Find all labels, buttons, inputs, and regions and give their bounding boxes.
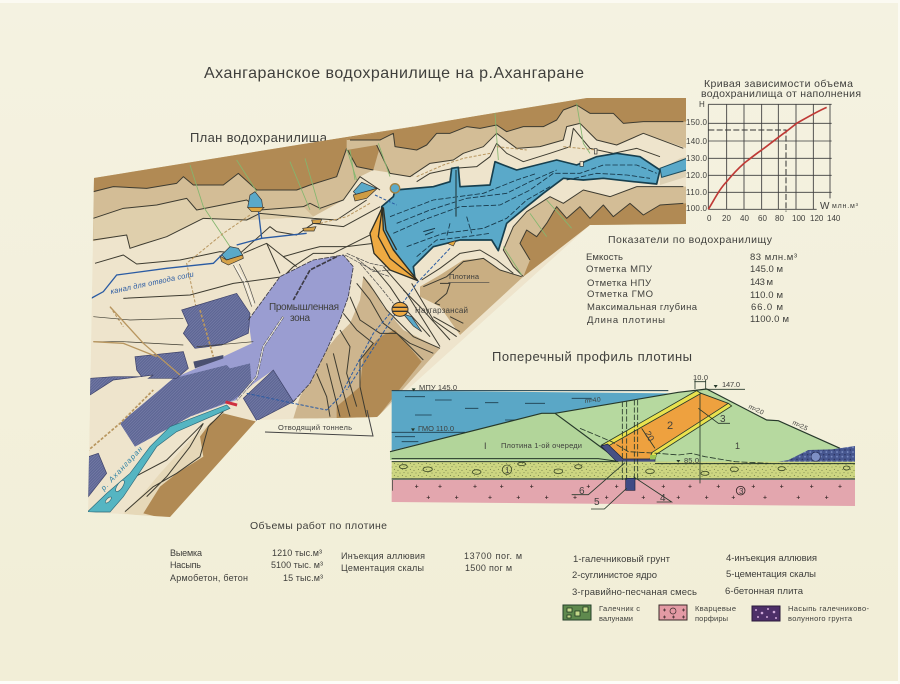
chart axis labels: 140 [827,214,841,223]
gravel toe [768,446,855,464]
chart axis labels: 60 [758,214,767,223]
map label: Naugarysay: Наугарзансай [415,306,468,315]
section labels: 20 [643,429,656,443]
chart axis labels: млн.м³ [832,203,859,210]
section labels: 10.0 [693,373,708,382]
chart axis labels: 80 [775,214,784,223]
rock layer [392,480,855,506]
legend: pebbles swatch [563,604,640,623]
dam [370,207,418,281]
table: dam works: 1500 пог м [465,563,512,573]
panel: reservoir indicators: Отметка НПУ [587,278,652,289]
leader lines [572,380,745,509]
map label: canal: канал для отвода соли [110,269,195,296]
table: dam works: Армобетон, бетон [170,573,248,583]
terrain west [90,127,413,327]
section labels: 5 [594,497,600,508]
tunnel label [265,410,373,436]
panel: reservoir indicators: Емкость [586,252,623,263]
section labels: m=2.0 [747,403,765,417]
seepage line [580,428,768,463]
section labels: МПУ 145.0 [419,383,457,392]
legend: materials list: 1-галечниковый грунт [573,554,671,565]
ponds and canal [85,182,400,307]
legend: porphyry swatch: Кварцевые [695,604,736,613]
chart axis labels: 120 [810,214,824,223]
section labels: 147.0 [722,380,740,389]
chart axis labels: W [820,201,830,212]
chart axis labels: 0 [707,214,712,223]
terrain east [347,97,687,277]
chart axis labels [686,100,859,223]
table: dam works [170,548,522,583]
table: dam works: 15 тыс.м³ [283,573,323,583]
section labels: 3 [720,414,726,425]
legend: porphyry swatch: порфиры [695,614,728,623]
chart axis labels: 150.0 [686,118,708,127]
core [607,392,728,459]
section labels: Плотина 1-ой очереди [501,441,582,450]
legend: materials list: 5-цементация скалы [726,569,816,580]
map label: river: р. Ахангаран [98,445,144,493]
first stage dam [390,413,622,462]
reservoir [347,149,687,390]
legend: materials list: 6-бетонная плита [725,586,804,597]
section labels: m=4.0 [584,396,601,405]
panel: reservoir plan map [85,97,687,520]
map heading: План водохранилища [190,130,328,145]
alluvium layer [392,462,855,478]
table: dam works: 1210 тыс.м³ [272,548,322,558]
chart axis labels: 120.0 [686,171,708,180]
river [87,405,230,512]
grout curtain [626,478,635,490]
chart axis labels: 110.0 [686,188,708,197]
chart axis labels: 100.0 [686,204,708,213]
legend: fill swatch: Насыпь галечниково- [788,604,870,613]
panel: reservoir indicators: Длина плотины [587,315,665,326]
section labels: m=2.5 [791,419,809,433]
map label: zone: зона [290,313,310,324]
chart axis labels: 100 [792,214,806,223]
map label: dam: Плотина [449,272,480,281]
legend: fill swatch [752,604,870,623]
section labels: 85.0 [684,456,699,465]
chart axis labels: 130.0 [686,154,708,163]
panel: reservoir indicators: 83 млн.м³ [750,252,797,263]
tunnel label: Отводящий тоннель [278,423,352,432]
section labels [418,373,809,508]
chart title: Кривая зависимости объема [704,78,853,90]
panel: reservoir indicators: Максимальная глубина [587,302,698,313]
chart: dam cross-section [390,373,855,509]
legend: materials list: 2-суглинистое ядро [572,570,657,581]
panel: reservoir indicators: 145.0 м [750,264,783,275]
panel: reservoir indicators: 110.0 м [750,290,783,301]
section labels: 3 [739,487,744,496]
section labels: 1 [505,466,510,475]
table: dam works: 5100 тыс. м³ [271,560,323,570]
terrain south of dam [293,250,523,418]
lower pond [392,302,422,332]
table: dam works: Инъекция аллювия [341,551,425,561]
legend: pebbles swatch: валунами [599,614,633,623]
legend: porphyry swatch [659,604,736,623]
terrain base [88,98,686,517]
table: dam works: 13700 пог. м [464,551,522,561]
section labels: 6 [579,486,585,497]
panel: reservoir indicators: Отметка ГМО [587,289,653,300]
panel: reservoir indicators: 143 м [750,277,773,288]
section labels: I [484,441,487,451]
panel: reservoir indicators: Показатели по водохранилищу [608,234,773,246]
legend: materials list: 3-гравийно-песчаная смесь [572,587,697,598]
southwest terrain [124,424,209,516]
section labels: 4 [660,493,666,504]
table: dam works: Выемка [170,548,202,558]
title: Ахангаранское водохранилище на р.Ахангаране [204,65,584,82]
chart title [701,78,861,100]
panel: reservoir indicators: 1100.0 м [750,314,789,325]
chart axis labels: 140.0 [686,137,708,146]
table: dam works: Цементация скалы [341,563,424,573]
map label: industrial zone: Промышленная [269,302,339,313]
section labels: 2 [667,420,673,432]
panel: reservoir indicators: Отметка МПУ [586,264,653,275]
chart title: водохранилища от наполнения [701,88,861,100]
table: dam works: Насыпь [170,560,201,570]
water [392,391,672,451]
legend: materials list: 4-инъекция аллювия [726,553,817,564]
legend: fill swatch: волунного грунта [788,614,853,623]
panel: reservoir indicators [586,234,797,326]
works heading: Объемы работ по плотине [250,520,387,532]
chart axis labels: Н [699,100,705,109]
chart axis labels: 20 [722,214,731,223]
legend: pebbles swatch: Галечник с [599,604,640,613]
chart: volume curve [686,78,861,223]
chart axis labels: 40 [740,214,749,223]
section labels: 1 [735,441,740,451]
dam body [390,389,855,464]
cross-section heading: Поперечный профиль плотины [492,349,692,364]
industrial zone [87,255,390,520]
panel: reservoir indicators: 66.0 м [751,302,783,313]
section labels: ГМО 110.0 [418,424,454,433]
legend: materials list [572,553,817,598]
